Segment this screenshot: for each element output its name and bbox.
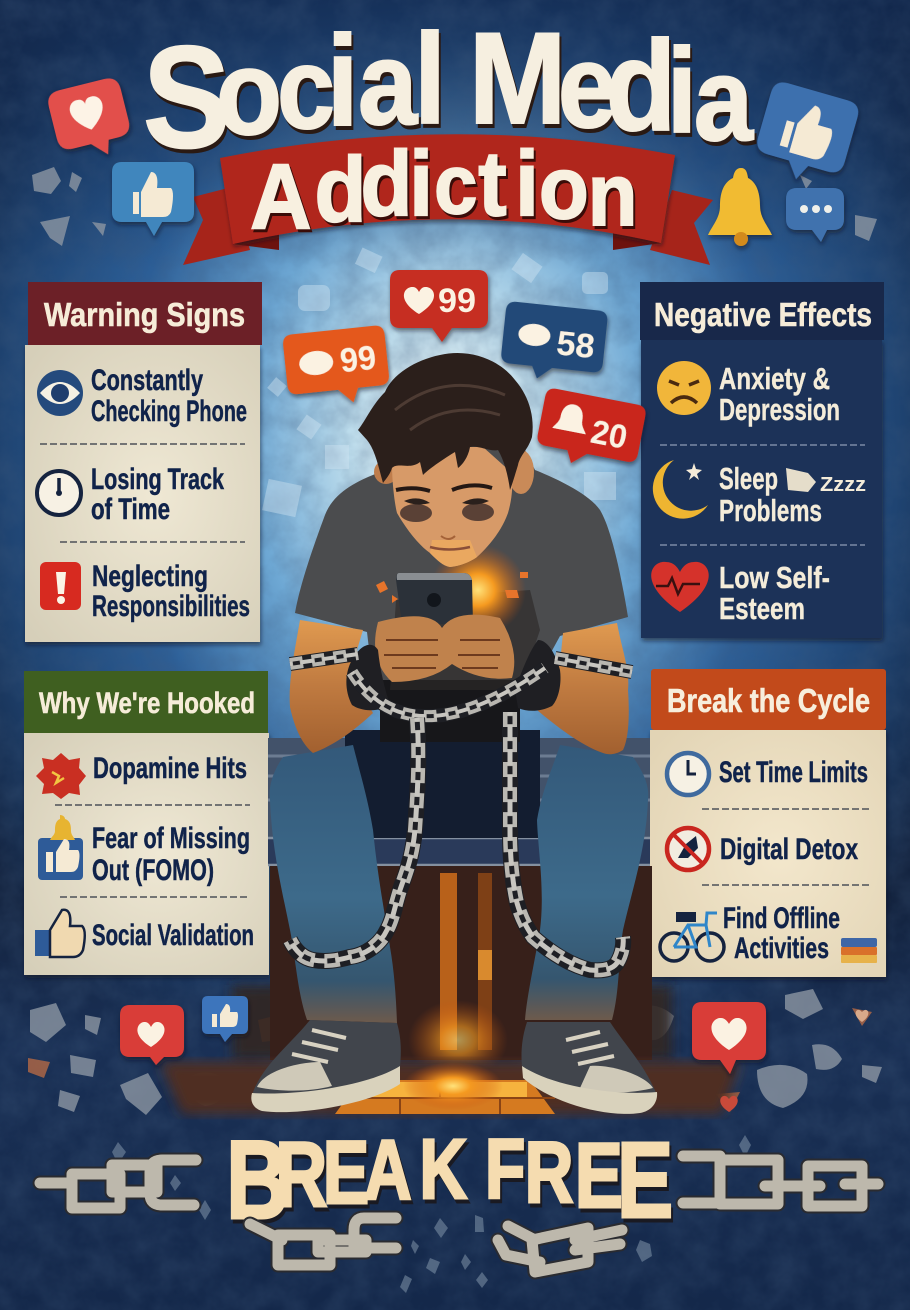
boy — [251, 353, 657, 1114]
text: losing track of time: Losing Track — [91, 463, 224, 496]
icon: sad face — [657, 361, 711, 415]
ribbon banner: Addiction: i — [517, 135, 541, 238]
dark trousers centre — [345, 730, 540, 838]
text: anxiety and depression: Anxiety & — [719, 361, 830, 396]
left jeans leg — [270, 745, 397, 1023]
icon: chat dots bubble — [786, 188, 844, 242]
icon: fomo thumbs up — [38, 815, 83, 880]
header: warning signs — [28, 282, 262, 345]
icon: lower right heart bubble — [692, 1002, 766, 1074]
text: fear of missing out: Fear of Missing — [92, 822, 250, 855]
text: find offline activities: Activities — [734, 932, 829, 965]
title: Social Media: e — [560, 24, 619, 156]
glow on chest — [430, 544, 526, 636]
title: Social Media: d — [606, 14, 676, 157]
ribbon banner: Addiction: c — [436, 141, 479, 235]
title: Social Media: i — [667, 25, 697, 158]
text: losing track of time — [91, 463, 224, 526]
broken chain: right — [683, 1156, 878, 1206]
ribbon banner: Addiction: t — [478, 132, 507, 235]
header: why we're hooked: Why We're Hooked — [39, 687, 255, 720]
ribbon banner: Addiction — [183, 132, 713, 265]
ribbon banner: Addiction: o — [541, 141, 591, 240]
icon: thumbs up — [35, 910, 85, 957]
ribbon banner: Addiction: d — [317, 141, 368, 244]
text: social validation: Social Validation — [92, 919, 254, 952]
bench and brick wall — [232, 738, 672, 1080]
icon: bicycle — [660, 912, 724, 961]
heading: break free: E — [577, 1128, 625, 1231]
heading: break free: A — [366, 1127, 414, 1221]
left arm — [290, 620, 373, 753]
notification bubble: comments 99: 99 — [338, 339, 378, 380]
title: Social Media: S — [143, 17, 230, 179]
text: anxiety and depression — [719, 361, 840, 427]
wrist wraps — [346, 640, 561, 711]
icon: moon — [653, 460, 708, 519]
panel: break the cycle — [650, 669, 886, 977]
text: neglecting responsibilities: Responsibilities — [92, 590, 250, 623]
title: Social Media: S — [145, 21, 232, 183]
text: constantly checking phone: Checking Phone — [91, 395, 247, 428]
heading: break free: K — [420, 1122, 485, 1216]
ribbon banner: Addiction: n — [590, 148, 639, 247]
icon: lower left thumbs up bubble — [202, 996, 248, 1042]
notification bubble: alerts 20 — [534, 387, 647, 475]
hands — [375, 615, 514, 682]
heading: break free: K — [422, 1126, 487, 1220]
ribbon banner: Addiction: n — [588, 145, 637, 244]
phone — [396, 573, 473, 624]
ribbon banner: Addiction: o — [539, 138, 589, 237]
icon: books — [841, 938, 877, 963]
header: break the cycle — [651, 669, 886, 730]
title: Social Media: a — [358, 17, 419, 149]
text: constantly checking phone: Constantly — [91, 364, 203, 397]
text: dopamine hits: Dopamine Hits — [93, 752, 247, 785]
icon: no phone sign — [667, 828, 709, 870]
ribbon banner: Addiction: d — [315, 138, 366, 241]
ribbon banner: Addiction: A — [250, 145, 311, 248]
heading: break free: R — [527, 1129, 575, 1225]
brick floor and glow — [160, 1062, 740, 1114]
title: Social Media: e — [558, 20, 617, 152]
heading: break free: E — [575, 1124, 623, 1227]
icon: heart bubble — [46, 76, 135, 165]
heading: break free: E — [619, 1123, 675, 1244]
notification bubble: comments 99 — [282, 325, 391, 409]
title: Social Media: M — [469, 6, 566, 151]
text: find offline activities: Find Offline — [723, 902, 840, 935]
heading: break free: E — [323, 1123, 369, 1222]
ribbon banner: Addiction: i — [515, 132, 539, 235]
text: losing track of time: of Time — [91, 493, 170, 526]
broken chain: bottom left — [250, 1218, 396, 1265]
heading: break free: E — [617, 1119, 673, 1240]
ribbon banner: Addiction: d — [363, 135, 414, 238]
text: sleep problems — [719, 461, 866, 528]
ribbon banner: Addiction: d — [361, 132, 412, 235]
shirt — [295, 440, 628, 700]
text: low self-esteem — [719, 560, 830, 626]
title: Social Media: c — [279, 29, 337, 157]
icon: small hearts — [720, 1010, 868, 1112]
title: Social Media: l — [414, 7, 478, 150]
heading: break free — [226, 1119, 675, 1247]
broken chain: left — [40, 1160, 196, 1208]
title: Social Media: i — [669, 29, 699, 162]
text: sleep problems: Zzzz — [820, 474, 866, 496]
text: fear of missing out: Out (FOMO) — [92, 854, 214, 887]
text: low self-esteem: Esteem — [719, 591, 805, 626]
notification bubble: messages 58: 58 — [555, 324, 596, 366]
header: negative effects: Negative Effects — [654, 296, 872, 333]
icon: bell — [708, 168, 772, 246]
text: sleep problems: Problems — [719, 493, 822, 528]
heading: break free: R — [525, 1125, 573, 1221]
icon: thumbs up bubble — [112, 162, 194, 236]
text: low self-esteem: Low Self- — [719, 560, 830, 595]
text: sleep problems: Sleep — [719, 461, 778, 496]
text: constantly checking phone — [91, 364, 247, 428]
text: digital detox: Digital Detox — [720, 833, 858, 866]
text: anxiety and depression: Depression — [719, 392, 840, 427]
notification bubble: alerts 20: 20 — [588, 413, 630, 456]
header: why we're hooked — [24, 671, 268, 733]
title: Social Media: a — [696, 37, 756, 169]
icon: eye — [37, 370, 83, 416]
heading: break free: E — [325, 1127, 371, 1226]
title: Social Media: l — [416, 11, 480, 154]
header: warning signs: Warning Signs — [44, 296, 245, 333]
icon: broken heart — [651, 562, 709, 612]
ribbon banner: Addiction: A — [252, 148, 313, 251]
heading: break free: B — [228, 1123, 291, 1247]
right jeans leg — [525, 745, 648, 1020]
icon: dopamine burst — [36, 753, 86, 799]
heading: break free: B — [226, 1119, 289, 1243]
title: Social Media: i — [329, 13, 361, 156]
icon: exclamation — [40, 562, 81, 610]
icon: time limit clock — [667, 753, 709, 795]
icon: lower left heart bubble — [120, 1005, 184, 1065]
heading: break free: F — [487, 1126, 527, 1220]
text: fear of missing out — [92, 822, 250, 887]
chains on arms and waist — [290, 654, 632, 970]
title: Social Media — [143, 6, 756, 183]
heading: break free: R — [277, 1127, 329, 1230]
ribbon banner: Addiction: i — [411, 135, 435, 238]
title: Social Media: o — [218, 31, 284, 164]
title: Social Media: a — [694, 33, 754, 165]
icon: clock — [37, 471, 81, 515]
notification bubble: messages 58 — [499, 301, 608, 385]
face — [374, 447, 534, 567]
header: negative effects — [640, 282, 884, 340]
broken chain: bottom right — [498, 1226, 622, 1272]
title: Social Media: M — [471, 10, 568, 155]
ribbon banner: Addiction: t — [480, 135, 509, 238]
ribbon banner: Addiction: c — [434, 138, 477, 232]
header: break the cycle: Break the Cycle — [667, 682, 870, 719]
heading: break free: R — [275, 1123, 327, 1226]
notification bubble: likes 99: 99 — [438, 282, 476, 320]
title: Social Media: a — [360, 21, 421, 153]
text: neglecting responsibilities: Neglecting — [92, 560, 208, 593]
heading: break free: F — [485, 1122, 525, 1216]
panel: negative effects — [640, 282, 884, 638]
ribbon banner: Addiction: i — [409, 132, 433, 235]
heading: break free: A — [364, 1123, 412, 1217]
hair — [358, 353, 533, 490]
title: Social Media: d — [608, 18, 678, 161]
right shoe — [522, 1022, 657, 1114]
text: neglecting responsibilities — [92, 560, 250, 623]
panel: why we're hooked — [24, 671, 269, 975]
notification bubble: likes 99 — [390, 270, 488, 342]
title: Social Media: i — [327, 9, 359, 152]
icon: large thumbs up bubble — [750, 79, 861, 191]
right arm — [537, 623, 629, 754]
title: Social Media: o — [216, 27, 282, 160]
panel: warning signs — [25, 282, 262, 642]
text: find offline activities — [723, 902, 840, 965]
left shoe — [251, 1020, 401, 1112]
title: Social Media: c — [277, 25, 335, 153]
